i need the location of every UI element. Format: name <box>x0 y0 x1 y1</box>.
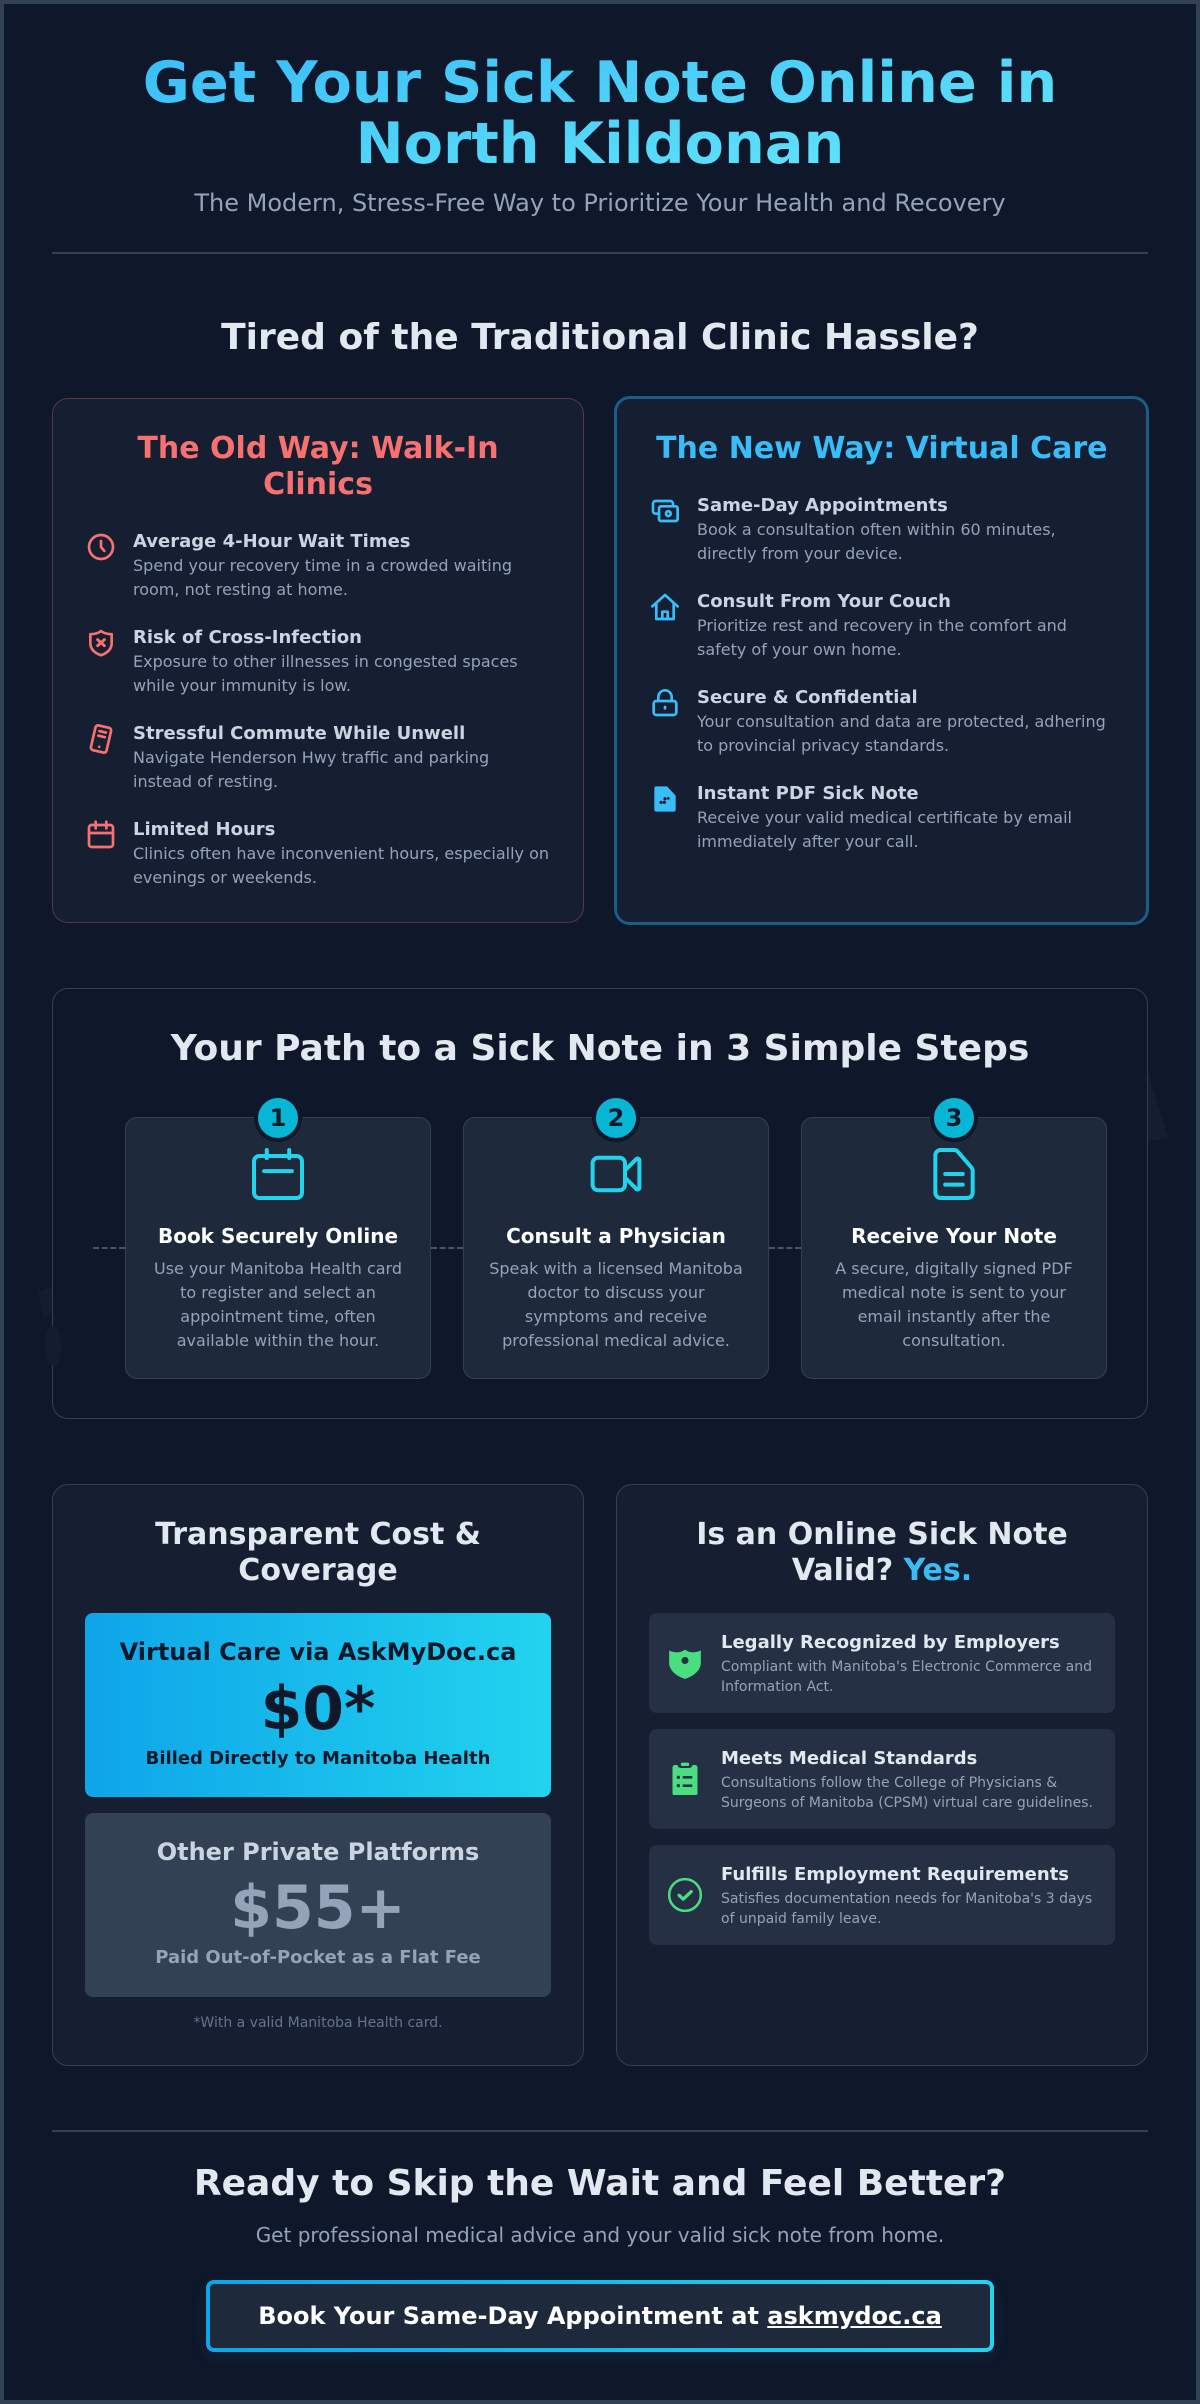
price: $55+ <box>230 1873 406 1943</box>
medical heading: Meets Medical Standards <box>721 1748 977 1769</box>
old item: wait times <box>88 531 512 599</box>
panel: new way <box>614 396 1149 925</box>
new item: secure: Secure & Confidential <box>697 687 918 708</box>
step 3 heading: Receive Your Note <box>851 1224 1057 1248</box>
title <box>143 49 1057 177</box>
new item: couch <box>650 591 1067 659</box>
old item: infection: Risk of Cross-Infection <box>133 627 362 648</box>
employers text: Compliant with Manitoba's Electronic Commerce and <box>721 1659 1092 1675</box>
icon: check circle <box>668 1878 702 1912</box>
new item: couch: safety of your own home. <box>697 640 902 659</box>
old item: infection: while your immunity is low. <box>133 676 351 695</box>
step 3 text <box>835 1259 1073 1350</box>
step 3 text: A secure, digitally signed PDF <box>835 1259 1073 1278</box>
old item: infection <box>89 627 518 695</box>
old item: hours: evenings or weekends. <box>133 868 317 887</box>
step 1 text: to register and select an <box>180 1283 376 1302</box>
step 1 text: Use your Manitoba Health card <box>154 1259 402 1278</box>
badge 1 <box>254 1094 302 1142</box>
validity heading <box>696 1517 1068 1588</box>
step 2 heading: Consult a Physician <box>506 1224 726 1248</box>
step 2 text: doctor to discuss your <box>527 1283 705 1302</box>
billing note: Billed Directly to Manitoba Health <box>146 1748 490 1769</box>
check: medical standards <box>649 1729 1115 1829</box>
new item: same day: Same-Day Appointments <box>697 495 948 516</box>
icon: calendar <box>252 1148 304 1200</box>
cost heading: Coverage <box>238 1553 398 1588</box>
new item: pdf <box>654 783 1072 851</box>
old item: commute: Stressful Commute While Unwell <box>133 723 465 744</box>
step 3 card <box>801 1117 1107 1379</box>
price box: others <box>85 1813 551 1997</box>
cost heading: Transparent Cost & <box>155 1517 481 1552</box>
old item: hours: Limited Hours <box>133 819 275 840</box>
step 2 text: Speak with a licensed Manitoba <box>489 1259 743 1278</box>
old item: commute <box>90 723 489 791</box>
check: employers <box>649 1613 1115 1713</box>
call to action button: Book Your Same-Day Appointment at askmydoc.ca <box>258 2302 942 2330</box>
validity heading: Valid? Yes. <box>792 1553 972 1588</box>
old item: commute: Navigate Henderson Hwy traffic and parking <box>133 748 489 767</box>
step 1 text: appointment time, often <box>180 1307 376 1326</box>
step 3 text: medical note is sent to your <box>842 1283 1066 1302</box>
call to action heading: Ready to Skip the Wait and Feel Better? <box>194 2163 1006 2204</box>
badge 1: 1 <box>270 1104 286 1132</box>
employment heading: Fulfills Employment Requirements <box>721 1864 1069 1885</box>
old item: hours <box>88 819 549 887</box>
call to action text: Get professional medical advice and your valid sick note from home. <box>256 2223 944 2247</box>
old way heading: Clinics <box>263 467 373 502</box>
old item: wait times: room, not resting at home. <box>133 580 348 599</box>
new item: same day: Book a consultation often within 60 minutes, <box>697 520 1056 539</box>
new item: same day: directly from your device. <box>697 544 903 563</box>
panel: old way <box>52 398 584 923</box>
step 3 text: consultation. <box>902 1331 1006 1350</box>
subtitle: The Modern, Stress-Free Way to Prioritize Your Health and Recovery <box>194 189 1006 217</box>
faint watermark <box>52 1326 53 1366</box>
new item: pdf: immediately after your call. <box>697 832 919 851</box>
step 1 heading: Book Securely Online <box>158 1224 398 1248</box>
billing note: Paid Out-of-Pocket as a Flat Fee <box>155 1947 481 1968</box>
employment text <box>721 1891 1092 1927</box>
icon: document <box>933 1148 975 1200</box>
medical text: Consultations follow the College of Physicians & <box>721 1775 1057 1791</box>
new item: couch: Prioritize rest and recovery in the comfort and <box>697 616 1067 635</box>
old way heading <box>137 431 499 502</box>
call to action button <box>206 2280 994 2352</box>
new item: secure: Your consultation and data are protected, adhering <box>697 712 1106 731</box>
connector <box>93 1247 125 1249</box>
steps heading: Your Path to a Sick Note in 3 Simple Steps <box>171 1028 1029 1069</box>
new item: couch: Consult From Your Couch <box>697 591 951 612</box>
new way heading: The New Way: Virtual Care <box>656 431 1108 466</box>
provider name: Virtual Care via AskMyDoc.ca <box>120 1638 516 1666</box>
old way heading: The Old Way: Walk-In <box>137 431 499 466</box>
footnote: *With a valid Manitoba Health card. <box>193 2015 443 2031</box>
panel: cost <box>52 1484 584 2066</box>
employers heading: Legally Recognized by Employers <box>721 1632 1060 1653</box>
title: North Kildonan <box>356 110 844 177</box>
new item: pdf: Receive your valid medical certificate by email <box>697 808 1072 827</box>
old item: hours: Clinics often have inconvenient hours, especially on <box>133 844 549 863</box>
badge 2: 2 <box>608 1104 624 1132</box>
title: Get Your Sick Note Online in <box>143 49 1057 116</box>
connector <box>769 1247 801 1249</box>
employers text: Information Act. <box>721 1679 833 1695</box>
icon: video <box>590 1156 642 1192</box>
step 1 text <box>154 1259 402 1350</box>
step 2 text: symptoms and receive <box>525 1307 707 1326</box>
provider name: Other Private Platforms <box>157 1838 479 1866</box>
panel: validity <box>616 1484 1148 2066</box>
badge 3: 3 <box>946 1104 962 1132</box>
cost heading <box>155 1517 481 1588</box>
check: employment <box>649 1845 1115 1945</box>
medical text <box>721 1775 1093 1811</box>
step 1 card <box>125 1117 431 1379</box>
validity heading: Is an Online Sick Note <box>696 1517 1068 1552</box>
step 2 text: professional medical advice. <box>502 1331 730 1350</box>
price box: virtual care <box>85 1613 551 1797</box>
employment text: of unpaid family leave. <box>721 1911 881 1927</box>
step 1 text: available within the hour. <box>177 1331 379 1350</box>
badge 2 <box>592 1094 640 1142</box>
new item: pdf: Instant PDF Sick Note <box>697 783 919 804</box>
employers text <box>721 1659 1092 1695</box>
old item: commute: instead of resting. <box>133 772 278 791</box>
icon: shield <box>669 1650 701 1679</box>
new item: secure: to provincial privacy standards. <box>697 736 949 755</box>
old item: infection: Exposure to other illnesses in congested spaces <box>133 652 518 671</box>
price: $0* <box>261 1674 375 1744</box>
new item: secure <box>652 687 1106 755</box>
new item: same day <box>652 495 1056 563</box>
old item: wait times: Spend your recovery time in a crowded waiting <box>133 556 512 575</box>
badge 3 <box>930 1094 978 1142</box>
step 3 text: email instantly after the <box>858 1307 1050 1326</box>
step 2 text <box>489 1259 743 1350</box>
old item: wait times: Average 4-Hour Wait Times <box>133 531 411 552</box>
heading: comparison: Tired of the Traditional Clinic Hassle? <box>221 317 979 358</box>
step 2 card <box>463 1117 769 1379</box>
panel: steps <box>52 988 1148 1419</box>
employment text: Satisfies documentation needs for Manitoba's 3 days <box>721 1891 1092 1907</box>
medical text: Surgeons of Manitoba (CPSM) virtual care guidelines. <box>721 1795 1093 1811</box>
icon: clipboard <box>672 1762 698 1795</box>
connector <box>431 1247 463 1249</box>
